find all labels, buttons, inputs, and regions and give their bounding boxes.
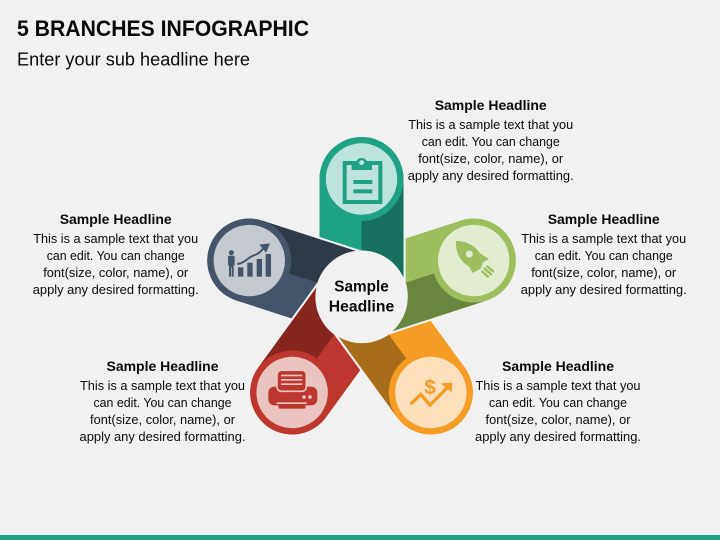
text block: right: font(size, color, name), or [531, 265, 677, 280]
text block: lower right: apply any desired formatting. [475, 429, 641, 444]
center circle [316, 250, 408, 342]
text block: left: can edit. You can change [47, 248, 185, 263]
text block: lower left: font(size, color, name), or [90, 412, 236, 427]
text block: top: apply any desired formatting. [408, 168, 574, 183]
text block: lower left: Sample Headline [106, 358, 219, 374]
bottom accent bar [0, 535, 720, 540]
text block: lower right: font(size, color, name), or [486, 412, 631, 427]
text block: right: This is a sample text that you [521, 231, 686, 246]
title: 5 BRANCHES INFOGRAPHIC [17, 16, 309, 41]
text block: lower left: apply any desired formatting. [80, 429, 246, 444]
icon: printer [268, 370, 317, 409]
text block: right: apply any desired formatting. [521, 282, 687, 297]
text block: top: can edit. You can change [422, 134, 560, 149]
icon: rocket [456, 241, 493, 277]
text block: lower left: can edit. You can change [94, 395, 232, 410]
text block: lower right: Sample Headline [502, 358, 614, 374]
branch: teal top [320, 137, 404, 278]
text block: lower right: This is a sample text that you [476, 378, 640, 393]
subtitle: Enter your sub headline here [17, 50, 250, 70]
text block: top [408, 97, 574, 183]
branch: red lower left [233, 288, 384, 451]
text block: left: This is a sample text that you [33, 231, 198, 246]
text block: top: font(size, color, name), or [418, 151, 564, 166]
icon: dollar growth arrow: $ [424, 376, 436, 399]
text block: left: Sample Headline [60, 211, 172, 227]
text block: right: can edit. You can change [535, 248, 673, 263]
text block: right [521, 211, 687, 297]
text block: right: Sample Headline [548, 211, 660, 227]
text block: lower left [80, 358, 246, 444]
center circle: Sample [334, 278, 389, 296]
center circle: Headline [329, 298, 394, 316]
text block: lower left: This is a sample text that you [80, 378, 245, 393]
text block: left [33, 211, 199, 297]
text block: lower right [475, 358, 641, 444]
text block: top: This is a sample text that you [408, 117, 573, 132]
text block: top: Sample Headline [435, 97, 547, 113]
icon: clipboard [345, 158, 380, 202]
branch: orange lower right [339, 288, 490, 451]
icon: person with growth chart [228, 243, 271, 277]
text block: left: apply any desired formatting. [33, 282, 199, 297]
branch: navy left [196, 208, 356, 331]
icon: dollar growth arrow [412, 376, 452, 405]
text block: lower right: can edit. You can change [489, 395, 627, 410]
text block: left: font(size, color, name), or [43, 265, 189, 280]
branch: green right [367, 208, 527, 331]
